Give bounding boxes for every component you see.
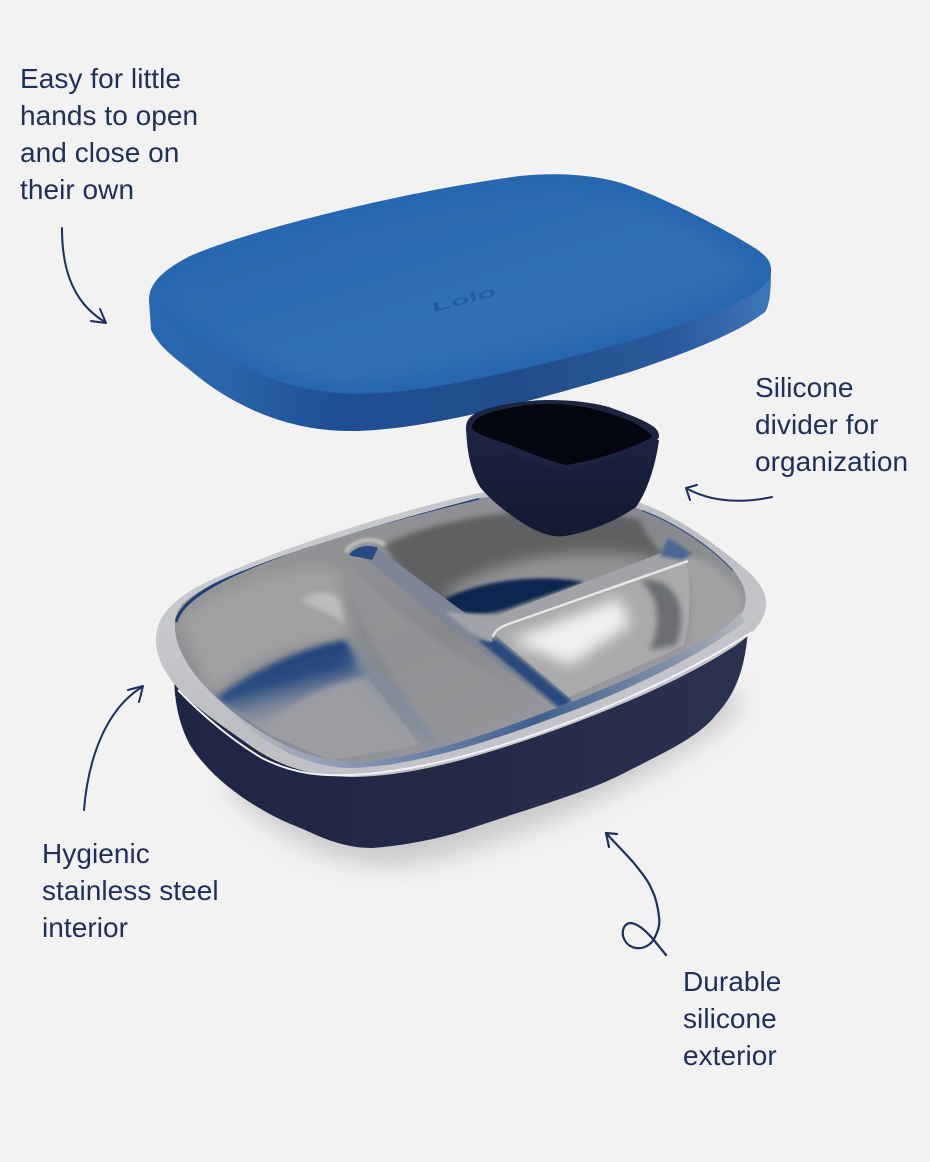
label: silicone exterior	[683, 966, 781, 1071]
label: stainless steel: interior	[42, 912, 128, 943]
tray exterior: navy silicone	[174, 630, 748, 848]
label: silicone divider: divider for	[755, 409, 878, 440]
arrow: to cup	[686, 485, 772, 501]
label: easy to open: hands to open	[20, 100, 198, 131]
lid top surface	[149, 174, 771, 394]
right compartment	[492, 562, 690, 698]
label: silicone exterior: silicone	[683, 1003, 777, 1034]
silicone divider cup	[466, 400, 659, 536]
label: easy to open: and close on	[20, 137, 179, 168]
blue rim reflections	[176, 498, 479, 622]
lid logo: Lolo	[430, 283, 498, 315]
label: stainless steel: Hygienic	[42, 838, 150, 869]
label: silicone divider: Silicone	[755, 372, 853, 403]
arrow: to silicone exterior	[606, 833, 666, 955]
glassy front wall band	[225, 612, 745, 768]
label: easy to open	[20, 63, 198, 205]
lid side wall	[149, 270, 771, 431]
label: easy to open: their own	[20, 174, 134, 205]
left compartment floor	[215, 640, 420, 760]
lid: blue cover	[149, 174, 771, 431]
tray interior: stainless steel compartments	[175, 494, 746, 768]
back compartment	[385, 511, 665, 625]
long divider wall	[360, 600, 459, 742]
label: stainless steel: stainless steel	[42, 875, 219, 906]
arrow: to lid	[62, 228, 106, 323]
shadow under tray	[230, 690, 740, 866]
product illustration: exploded lunch box	[61, 174, 773, 956]
right side ledge	[686, 557, 741, 648]
cross divider	[450, 552, 690, 642]
tray rim: stainless steel	[156, 489, 766, 777]
label: stainless steel	[42, 838, 219, 943]
label: silicone exterior: exterior	[683, 1040, 777, 1071]
label: silicone exterior: Durable	[683, 966, 781, 997]
label: silicone divider: organization	[755, 446, 908, 477]
long divider	[362, 549, 572, 708]
label: silicone divider	[755, 372, 908, 477]
label: easy to open: Easy for little	[20, 63, 181, 94]
left compartment walls	[180, 568, 350, 695]
arrow: to steel interior	[84, 686, 143, 810]
